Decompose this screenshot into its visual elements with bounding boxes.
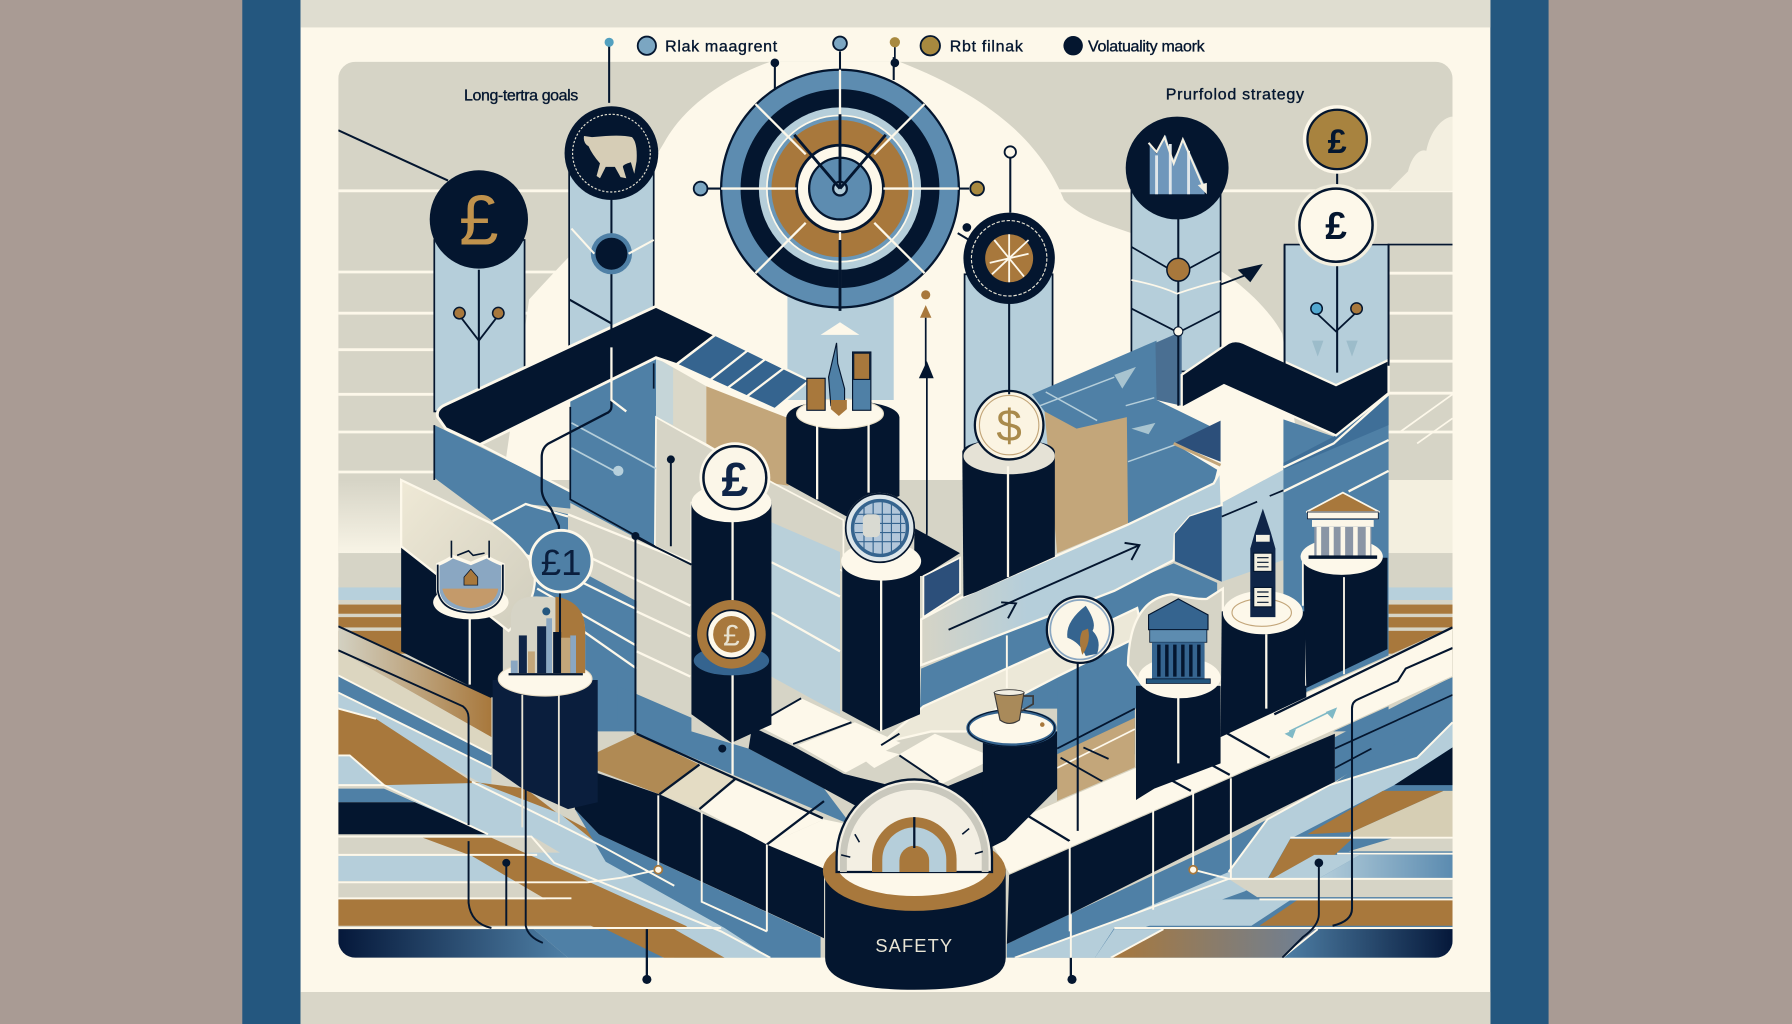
chart column base: [1155, 331, 1182, 406]
icon: bars: [509, 585, 585, 674]
beige wall panels: [568, 516, 637, 692]
beige wall lower: [655, 417, 843, 571]
navy under right tile: [903, 763, 1008, 843]
icon: gauge dial: [837, 779, 992, 872]
column: right pound: [1285, 245, 1389, 389]
cream wall edge lines: [493, 504, 637, 669]
left pathway tiles: [576, 734, 851, 869]
target outer wires: [609, 46, 1010, 240]
column: chart: [1131, 189, 1221, 371]
light blue descending band: [1222, 470, 1283, 582]
right blue wall: [1283, 394, 1389, 731]
icon: gold pound coin: £: [723, 620, 740, 653]
arrow: vertical: [914, 290, 934, 551]
bottom left bands: [338, 625, 821, 958]
bottom-left wires: [338, 626, 543, 943]
pillar: shield: [401, 480, 535, 699]
column: bull: [569, 171, 654, 366]
bottom right bands: [1007, 677, 1453, 958]
triangle pointer: [821, 322, 859, 335]
pillar: dollar: [962, 391, 1055, 597]
target nodes: [694, 37, 1033, 231]
navy ribbon right: [1182, 341, 1389, 435]
wall dots: [631, 455, 726, 753]
top-left diagonal wire: [338, 130, 448, 181]
sky panel: [338, 62, 1453, 958]
left blue wall: [434, 425, 570, 521]
gauge pedestal: [823, 779, 1006, 990]
right tile stems: [1070, 778, 1231, 931]
wires: columns: [479, 167, 1337, 406]
left tile separators: [637, 734, 824, 845]
left pathway wall: [575, 766, 824, 938]
upper left pathway tiles: [755, 698, 995, 784]
blue floor below band: [920, 563, 1217, 709]
right lower wire and dot: [1282, 859, 1323, 958]
right long wire: [1333, 648, 1453, 926]
infographic canvas: [242, 0, 1549, 1024]
icon: shield crest: [438, 541, 503, 613]
room outline and wires: [434, 363, 655, 546]
column: pound: [434, 240, 525, 411]
node: gold chart column: [1131, 247, 1263, 336]
icon: gold pound coin top: [1303, 105, 1371, 174]
pillar: big ben: [1221, 509, 1306, 737]
column: star: [965, 274, 1053, 457]
light blue panel: [771, 522, 840, 714]
legend item: risk fillnak: Rbt filnak: [950, 38, 1024, 55]
pound badge: pale blue: [530, 530, 592, 592]
icon: coffee cup: [994, 690, 1045, 727]
vertical wires through wall: [635, 459, 691, 734]
striped ribbon segment: [677, 335, 809, 409]
node: blue centre bull column: [571, 229, 654, 274]
blue band behind left pathway: [617, 686, 851, 825]
wire dot: [502, 859, 510, 867]
icon: temple: [1306, 493, 1379, 559]
panel: illustrated scene: [338, 62, 1453, 958]
diagonal arrow: [949, 543, 1139, 630]
right short wire: [1335, 695, 1453, 768]
cream column: [1222, 480, 1264, 502]
icon: pound coin: [699, 442, 770, 513]
right pathway wall: [1007, 734, 1335, 944]
target: risk dial: [721, 70, 959, 335]
heading: long-term goals: Long-tertra goals: [464, 88, 578, 105]
pathway double arrow: [1285, 707, 1337, 738]
pillar: white pound: [691, 442, 771, 775]
right tan block: [1045, 411, 1128, 553]
right blue surface: [1032, 341, 1217, 523]
icon: falling chart circle: [1126, 117, 1229, 219]
dashed cross line: [1222, 490, 1283, 517]
light blue upper band: [921, 471, 1222, 665]
legend item: volatility mark: Volatuality maork: [1088, 38, 1206, 55]
wire nodes: y shaped left: [454, 307, 504, 341]
small ring marker left: [654, 866, 662, 874]
cloud: [1389, 117, 1453, 191]
pillar: cup: [968, 690, 1057, 851]
icon: dollar coin: [975, 391, 1043, 459]
icon: dollar coin: $: [996, 400, 1022, 451]
small ring marker right: [1189, 866, 1197, 874]
icon: pound circle: [430, 170, 528, 269]
right pathway tiles: [990, 627, 1453, 874]
hatch block: [923, 558, 960, 617]
small dark panel: [1174, 421, 1221, 462]
right tile separators: [1026, 627, 1453, 841]
pillar: bank: [1136, 599, 1221, 800]
icon: globe coin: [846, 494, 914, 562]
arrowhead: pale: [1114, 367, 1136, 389]
left tile stems: [658, 795, 767, 931]
legend item: risk fillnak: [921, 36, 1024, 55]
horizon lines: [338, 191, 1453, 472]
legend: [638, 36, 1206, 55]
icon: blue bank: [1146, 599, 1210, 683]
compass badge: [1047, 597, 1113, 663]
pound badge: pale blue: £1: [541, 542, 581, 583]
icon: white pound coin: [1295, 184, 1377, 266]
icon: city towers: [807, 343, 871, 416]
right bracket line: [1285, 245, 1453, 366]
central cream arch: [503, 62, 1303, 480]
pillar: bar chart: [493, 585, 598, 827]
pillar: city skyline: [786, 343, 899, 517]
icon: gold pound coin: [694, 600, 769, 675]
icon: star circle: [963, 213, 1055, 304]
heading: portfolio strategy: Prurfolod strategy: [1166, 86, 1304, 103]
label: safety: SAFETY: [875, 935, 953, 956]
lower side bands: [338, 480, 1453, 654]
lower blue and gold behind cup: [1057, 643, 1145, 829]
navy strip under upper tiles: [749, 727, 949, 825]
bank cream blob: [1128, 589, 1223, 686]
navy block under globe: [914, 528, 960, 576]
lt blue wall sliver: [656, 358, 673, 425]
lower blue floor: [492, 505, 637, 732]
connector pins outside panel: [605, 37, 1077, 984]
tan wall: [706, 386, 789, 486]
icon: gold pound coin top: £: [1328, 123, 1347, 161]
blue room: [570, 358, 656, 549]
beige wall upper: [662, 362, 706, 443]
column: target: [787, 286, 894, 400]
icon: pound coin: £: [722, 454, 749, 507]
wire nodes: y shaped right: [1311, 303, 1362, 357]
icon: big ben tower: [1250, 509, 1275, 617]
icon: pound circle: £: [459, 182, 499, 261]
tile: gold: [576, 734, 699, 794]
dark gradient block: [1175, 506, 1222, 582]
wire: compass stem: [1077, 662, 1079, 831]
arrowhead: pale small: [1131, 423, 1155, 434]
pillar: temple: [1301, 493, 1387, 688]
icon: bull circle: [565, 106, 658, 200]
pillar: globe coin: [841, 494, 921, 731]
cream diagonal strip: [882, 608, 1143, 743]
room marker: [613, 466, 623, 476]
icon: white pound coin: £: [1325, 205, 1347, 248]
legend item: risk management: Rlak maagrent: [665, 38, 778, 55]
navy ribbon left: [437, 306, 715, 445]
